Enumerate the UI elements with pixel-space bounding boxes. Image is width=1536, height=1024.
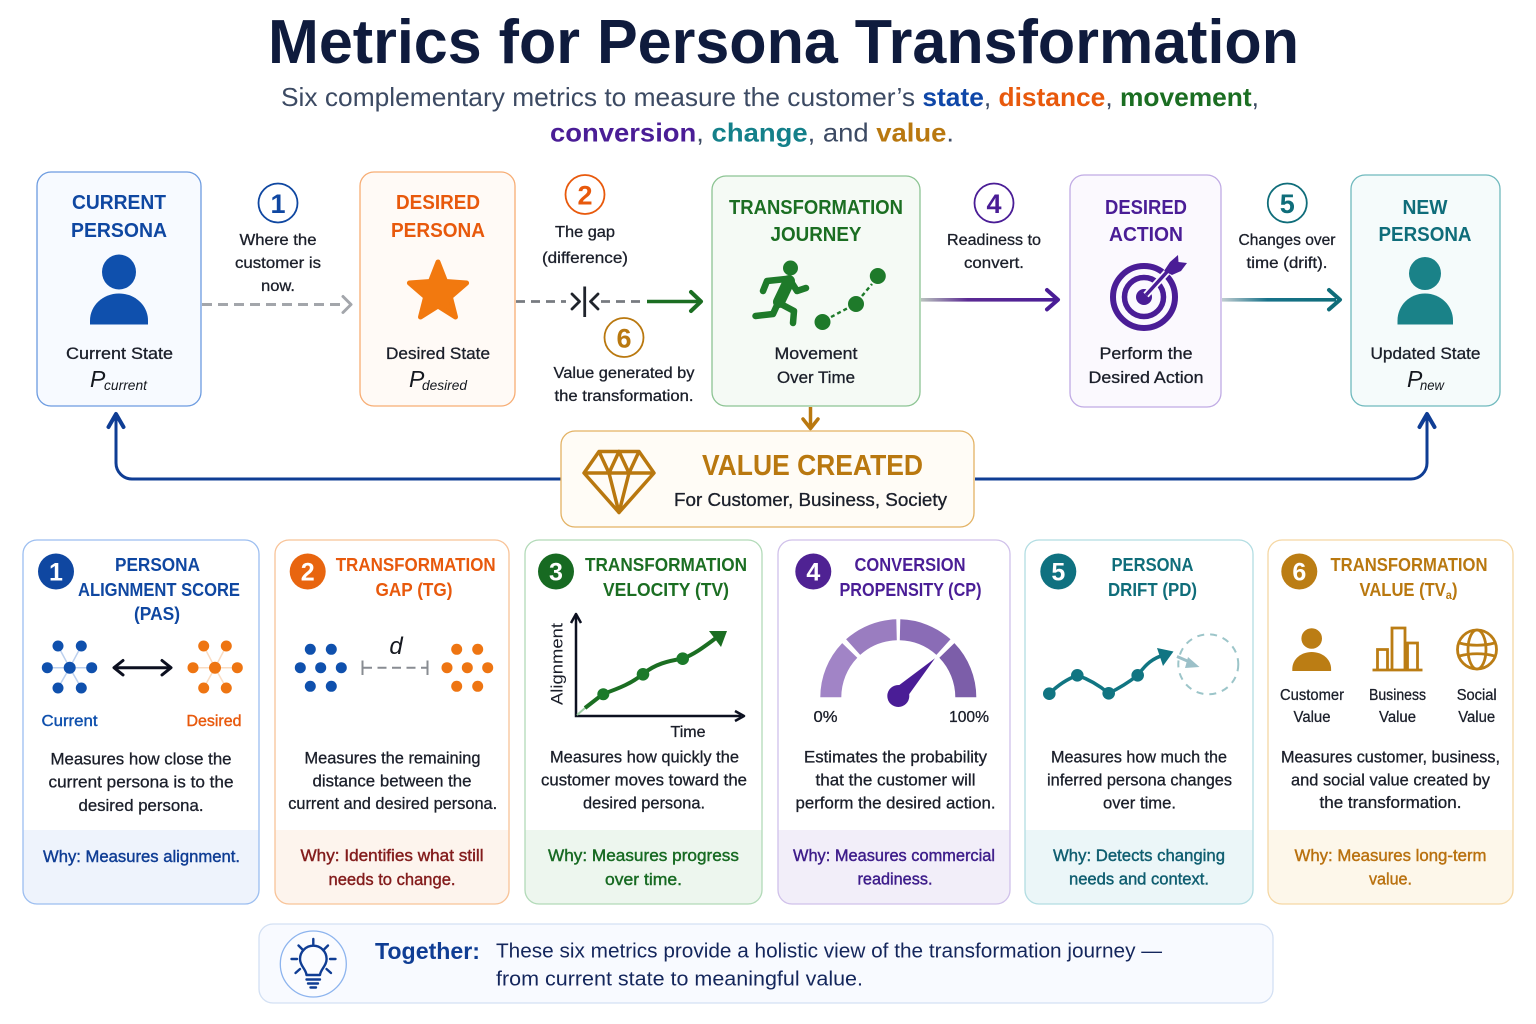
icon: person [90,254,148,324]
chart: gauge: 0% [814,709,838,726]
text: updated state: Updated State [1370,344,1480,363]
labels: value types: Value [1458,709,1495,726]
heading: TRANSFORMATION [1330,555,1488,575]
callout: metric 1: customer is [235,255,321,272]
callout: metric 5: 5 [1280,189,1295,219]
formula: P desired [409,366,468,393]
heading: ALIGNMENT SCORE [78,580,240,600]
callout: metric 2: (difference) [542,250,628,267]
heading: PERSONA [115,555,200,575]
badge 4 [795,554,831,590]
description: current persona is to the [48,772,234,792]
formula: P current: P [90,366,106,392]
heading [840,555,982,600]
why: Why: Measures commercial [793,847,995,865]
text: movement over time: Over Time [777,368,855,387]
heading: transformation journey: JOURNEY [770,224,862,246]
description: and social value created by [1291,770,1490,790]
arrow: current to desired [202,296,351,312]
arrow: journey to value [803,407,818,428]
labels: current and desired: Desired [186,713,242,730]
panel: metric 6 transformation value [1268,540,1513,904]
heading: new persona: PERSONA [1378,224,1472,246]
description: current and desired persona. [288,794,497,813]
callout: metric 6: the transformation. [554,388,694,405]
diagram: desired cluster [188,640,243,694]
description: perform the desired action. [796,794,996,812]
text: movement over time: Movement [774,344,858,363]
description [796,748,996,812]
arrow: journey to action [921,290,1058,309]
description: Measures the remaining [304,748,480,768]
heading: VALUE (TV [1360,580,1453,600]
heading: a [1446,588,1452,602]
icon: diamond [584,452,654,512]
panel: current persona [37,172,201,406]
chart: drift path [1043,634,1238,700]
badge 5: 5 [1051,558,1065,586]
labels: value types: Customer [1280,687,1345,704]
icon: globe [1458,630,1496,669]
callout: metric 4: convert. [964,255,1024,272]
callout: metric 1 [235,184,321,295]
labels: current and desired [42,713,242,730]
heading: desired persona [391,192,485,242]
description: inferred persona changes [1047,770,1232,790]
badge 3: 3 [549,558,563,586]
heading [1108,555,1197,600]
heading: (PAS) [134,604,180,624]
description: over time. [1103,794,1176,812]
callout: metric 2: 2 [577,180,593,210]
heading [336,555,496,600]
panel: metric 5 persona drift [1025,540,1253,904]
callout: metric 2: The gap [555,224,615,241]
why [1294,847,1486,888]
description [1281,748,1500,812]
description: Measures customer, business, [1281,748,1500,766]
heading: desired action: ACTION [1109,224,1183,246]
panel: transformation journey [712,176,920,406]
description: distance between the [312,772,472,790]
labels: value types: Social [1457,687,1497,704]
panel: metric 1 persona alignment score [23,540,259,904]
icon: runner and path [756,260,886,330]
badge 1: 1 [49,558,63,586]
description: desired persona. [78,796,204,815]
subtitle [281,82,1259,148]
callout: metric 4 [947,184,1041,272]
why [1053,847,1225,888]
callout: metric 4: 4 [986,189,1002,219]
heading: TRANSFORMATION [336,555,496,575]
text: summary: from current state to meaningful value. [496,968,863,990]
diagram: distance d: d [389,633,403,660]
panel: together summary [259,924,1273,1003]
heading: PROPENSITY (CP) [840,580,982,600]
text: perform the desired action [1088,344,1204,387]
formula: P current [90,366,148,393]
description: that the customer will [816,770,976,790]
icon: business [1372,628,1422,670]
description: desired persona. [583,794,705,812]
badge 2: 2 [301,558,315,586]
callout: metric 4: Readiness to [947,232,1041,249]
why [793,847,995,888]
why: needs to change. [328,871,456,889]
callout: metric 5: time (drift). [1246,255,1328,272]
panel: new persona [1351,175,1500,406]
why: Why: Identifies what still [300,847,484,865]
subtitle: Six complementary metrics to measure the customer’s state, distance, movement, [281,82,1259,112]
description: the transformation. [1320,793,1462,812]
badge 2 [290,554,326,590]
diagram: distance d [362,633,428,675]
heading: new persona [1378,197,1472,246]
callout: metric 6 [554,318,694,405]
panel: metric 3 transformation velocity [525,540,762,904]
chart: gauge: 100% [949,709,989,726]
badge 6: 6 [1292,558,1306,586]
badge 4: 4 [806,558,820,586]
heading: TRANSFORMATION [585,555,747,575]
callout: metric 2 [542,175,628,267]
formula: P desired: P [409,366,425,392]
description [541,748,747,812]
flow arrow: return from value to new persona [975,414,1434,479]
heading: value created: VALUE CREATED [702,450,923,482]
heading: current persona: CURRENT [72,192,166,214]
description: customer moves toward the [541,770,747,790]
heading: current persona [71,192,167,242]
heading: transformation journey: TRANSFORMATION [729,197,903,219]
icon: target [1113,255,1187,328]
description [1047,748,1232,812]
why: Why: Measures progress [548,847,739,865]
icon: person [1398,257,1453,324]
text: summary: These six metrics provide a holistic view of the transformation journey — [496,940,1162,962]
badge 5 [1040,554,1076,590]
arrow: gap marker into journey [516,286,701,317]
callout: metric 6: 6 [616,324,632,354]
labels: value types: Value [1379,709,1416,726]
why: Why: Detects changing [1053,847,1225,865]
callout: metric 5 [1238,184,1336,272]
heading: GAP (TG) [376,580,452,600]
labels: value types: Business [1369,687,1426,704]
heading: desired persona: PERSONA [391,220,485,242]
heading: current persona: PERSONA [71,220,167,242]
callout: metric 6: Value generated by [554,365,694,382]
panel: metric 4 conversion propensity [778,540,1010,904]
badge 1 [38,554,74,590]
chart: alignment over time [548,614,744,741]
arrow: action to new persona [1222,290,1340,309]
why: over time. [605,871,682,889]
flow arrow: return from value to current persona [108,414,561,479]
description: Estimates the probability [804,748,987,766]
formula: P desired: desired [422,377,468,393]
why [548,847,739,889]
heading: transformation journey [729,197,903,246]
text: current state: Current State [66,344,173,363]
title: Metrics for Persona Transformation [268,8,1299,77]
callout: metric 1: 1 [270,189,286,219]
formula: P current: current [104,377,148,393]
icon: customer [1292,628,1331,671]
text: for customer, business, society: For Customer, Business, Society [674,490,947,510]
text: desired state: Desired State [386,344,490,363]
why: value. [1369,870,1412,888]
diagram: current cluster [42,640,97,694]
chart: alignment over time: Time [670,724,706,741]
text: perform the desired action: Perform the [1100,344,1192,363]
description: Measures how much the [1051,748,1227,766]
badge 6 [1281,554,1317,590]
formula: P new [1407,366,1445,393]
description [288,748,497,813]
heading: ) [1452,580,1458,600]
labels: value types [1280,687,1497,726]
heading: VELOCITY (TV) [603,580,729,600]
why: Why: Measures alignment. [43,848,240,866]
why: Why: Measures long-term [1294,847,1486,865]
chart: gauge [814,619,989,726]
panel: desired persona [360,172,515,406]
diagram: desired cluster [442,644,493,692]
panel: desired action [1070,175,1221,407]
why [300,847,484,889]
icon: light bulb [280,931,346,997]
why: needs and context. [1069,870,1209,888]
chart: alignment over time: Alignment [548,623,566,705]
heading: CONVERSION [854,555,966,575]
formula: P new: P [1407,366,1423,392]
text: summary [496,940,1162,990]
panel: metric 2 transformation gap [275,540,509,904]
text: movement over time [774,344,858,387]
diagram: current cluster [295,644,347,692]
icon: star [409,262,467,317]
description: Measures how close the [50,750,232,768]
heading: desired persona: DESIRED [396,192,480,214]
label: together: Together: [375,938,480,964]
why: readiness. [858,870,932,888]
badge 3 [538,554,574,590]
subtitle: conversion , change, and value. [550,118,954,148]
heading: PERSONA [1112,555,1194,575]
heading: DRIFT (PD) [1108,580,1197,600]
formula: P new: new [1420,377,1445,393]
heading [1330,555,1488,602]
heading: desired action: DESIRED [1105,197,1187,219]
description [48,750,234,815]
arrow: double-headed [114,660,171,675]
labels: current and desired: Current [42,713,98,730]
heading [585,555,747,600]
text: perform the desired action: Desired Action [1088,368,1204,387]
panel: value created [561,431,974,527]
callout: metric 1: Where the [240,232,317,249]
heading: new persona: NEW [1402,197,1448,219]
callout: metric 5: Changes over [1238,232,1336,249]
description: Measures how quickly the [550,748,739,766]
heading: desired action [1105,197,1187,246]
heading [78,555,240,624]
callout: metric 1: now. [261,278,295,295]
labels: value types: Value [1294,709,1331,726]
